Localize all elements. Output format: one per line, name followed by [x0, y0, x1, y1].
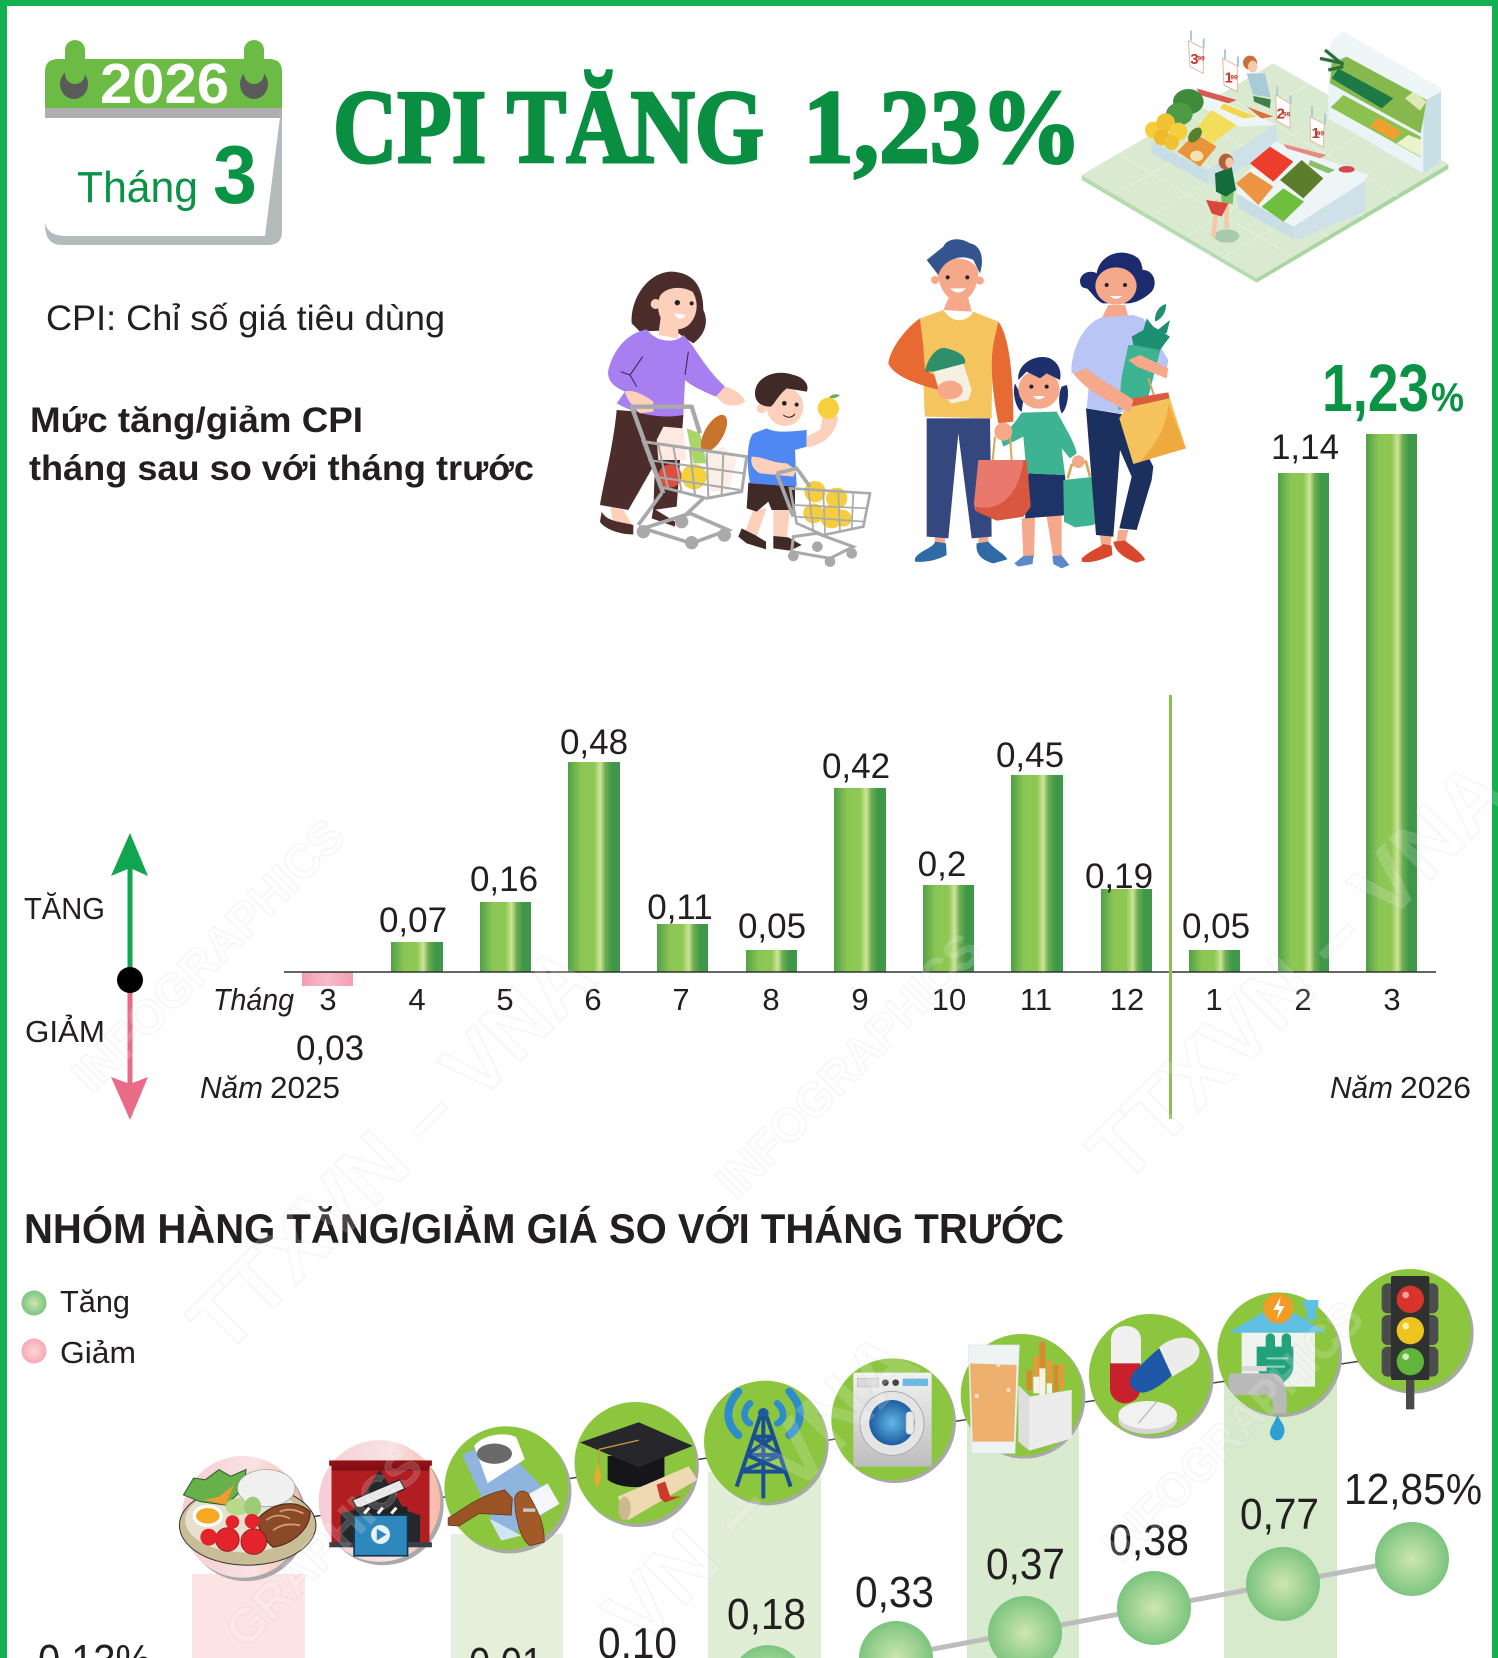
icon: culture and entertainment	[319, 1440, 444, 1565]
month axis labels: 9	[851, 982, 869, 1017]
watermark: INFOGRAPHICS	[62, 809, 356, 1103]
icon: beverages and tobacco	[961, 1334, 1085, 1459]
month axis labels: 1	[1205, 982, 1223, 1017]
CPI definition: CPI: Chỉ số giá tiêu dùng	[46, 299, 445, 338]
month axis labels: 3	[1383, 982, 1401, 1017]
bar chart: monthly CPI change	[200, 351, 1471, 1119]
month axis labels: 4	[408, 982, 426, 1017]
month axis labels	[213, 982, 1401, 1017]
icon: post and telecommunications	[704, 1381, 829, 1505]
value labels	[296, 428, 1339, 1068]
value labels: 0,48	[560, 723, 628, 762]
illustration: market stalls	[1082, 31, 1448, 283]
title: CPI TĂNG	[333, 68, 764, 185]
trend line with group markers	[740, 1522, 1449, 1658]
group values: 0,77	[1240, 1490, 1319, 1539]
illustration: market stalls: 2	[1277, 107, 1285, 123]
watermark: GRAPHICS	[215, 1440, 433, 1658]
icon: housing, electricity and water	[1217, 1292, 1342, 1440]
month axis labels: 5	[496, 982, 514, 1017]
value labels: 0,45	[996, 736, 1064, 775]
value labels: 0,42	[822, 747, 890, 786]
calendar badge: 2026	[100, 52, 229, 116]
value labels: 0,11	[647, 888, 713, 927]
illustration: family with shopping bags	[888, 239, 1186, 568]
icon: food	[179, 1456, 316, 1581]
watermark: INFOGRAPHICS	[1092, 1291, 1374, 1573]
value labels: 0,05	[738, 907, 806, 946]
group column stripes	[192, 1353, 1337, 1658]
watermark: INFOGRAPHICS	[706, 924, 991, 1209]
month axis labels: 2	[1294, 982, 1312, 1017]
icon: household appliances	[831, 1358, 956, 1483]
value labels: 0,19	[1085, 857, 1153, 896]
watermark: TTXVN – VNA	[171, 928, 613, 1370]
month axis labels: 3	[319, 982, 337, 1017]
chart heading	[29, 401, 534, 488]
group values: 0,33	[855, 1568, 934, 1617]
chart heading: Mức tăng/giảm CPI	[30, 401, 363, 440]
month axis labels: 11	[1020, 982, 1052, 1017]
highlighted value: 1,23	[1322, 351, 1429, 426]
group values: 12,85%	[1344, 1465, 1482, 1514]
month axis labels: 7	[672, 982, 690, 1017]
arrows: increase / decrease key	[24, 833, 148, 1120]
illustration: market stalls: 1	[1225, 71, 1233, 87]
arrows: increase / decrease key: TĂNG	[24, 891, 105, 926]
month axis labels: 12	[1110, 982, 1144, 1017]
watermark: VN – VNA	[586, 1313, 936, 1658]
illustration: market stalls: 99	[1230, 74, 1238, 81]
group values	[38, 1465, 1482, 1658]
illustration: market stalls: 1	[1312, 126, 1320, 142]
value labels: 0,07	[379, 901, 447, 940]
icon: medicine	[1089, 1314, 1214, 1439]
legend	[22, 1284, 136, 1370]
year label 2026: 2026	[1400, 1070, 1471, 1105]
title	[333, 68, 1082, 185]
bars	[302, 434, 1417, 986]
value labels: 0,16	[470, 860, 538, 899]
month axis labels: 6	[584, 982, 602, 1017]
group values: 0,18	[727, 1590, 806, 1639]
calendar badge	[45, 40, 282, 245]
arrows: increase / decrease key: GIẢM	[25, 1014, 105, 1049]
illustration: market stalls: 3	[1190, 52, 1198, 68]
value labels: 0,05	[1182, 907, 1250, 946]
illustration: market stalls: 99	[1283, 112, 1291, 119]
title: 1,23%	[803, 68, 1082, 185]
value labels: 0,03	[296, 1029, 364, 1068]
year label 2026	[1330, 1070, 1471, 1105]
icon: transport	[1349, 1269, 1474, 1409]
month axis labels: 10	[932, 982, 966, 1017]
year label 2025: 2025	[270, 1070, 340, 1105]
year label 2026: Năm	[1330, 1070, 1393, 1105]
calendar badge: Tháng	[77, 163, 198, 212]
year label 2025: Năm	[200, 1070, 263, 1105]
illustration: mother and son with carts	[600, 272, 870, 567]
year label 2025	[200, 1070, 340, 1105]
icon: education	[575, 1402, 699, 1527]
month axis labels: Tháng	[213, 982, 294, 1017]
icon: clothing and footwear	[444, 1426, 571, 1553]
value labels: 0,2	[918, 845, 966, 884]
illustration: market stalls: 99	[1197, 56, 1205, 63]
highlighted value: %	[1431, 374, 1464, 420]
illustration: market stalls: 99	[1317, 130, 1324, 137]
calendar badge: 3	[213, 128, 257, 221]
month axis labels: 8	[762, 982, 780, 1017]
chart heading: tháng sau so với tháng trước	[29, 449, 534, 488]
group values: 0,38	[1109, 1516, 1189, 1565]
legend: Giảm	[60, 1335, 136, 1370]
legend: Tăng	[60, 1284, 130, 1319]
section heading: NHÓM HÀNG TĂNG/GIẢM GIÁ SO VỚI THÁNG TRƯỚC	[24, 1204, 1064, 1252]
group values: 0,37	[986, 1540, 1065, 1589]
watermark	[62, 744, 1498, 1658]
value labels: 1,14	[1271, 428, 1339, 467]
connector line behind icons	[250, 1354, 1408, 1526]
